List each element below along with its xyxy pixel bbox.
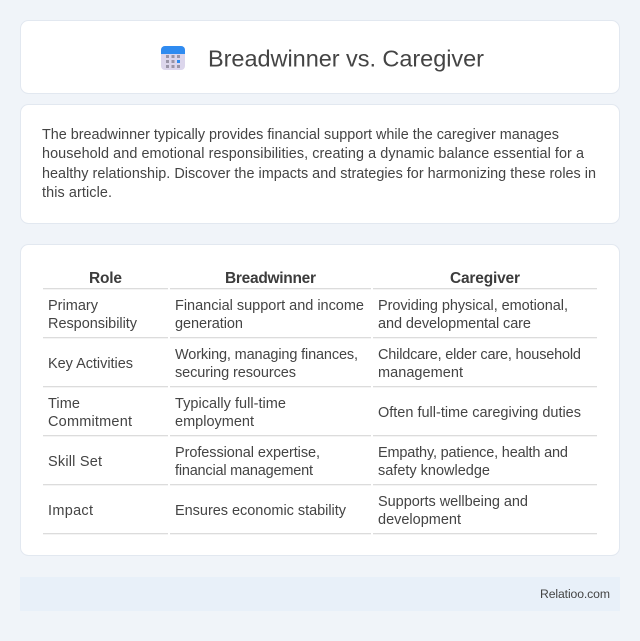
panel: comparison table [20,244,620,556]
row: key activities: Childcare, elder care, household [378,347,581,363]
intro text: healthy relationship. Discover the impacts and strategies for harmonizing these roles in [42,166,596,182]
intro text: The breadwinner typically provides financial support while the caregiver manages [42,127,559,143]
row: time commitment: Often full-time caregiving duties [378,405,581,421]
row: impact: Ensures economic stability [175,503,347,519]
row: time commitment: Time [48,396,80,412]
row: skill set [48,445,568,479]
footer credit: Relatioo.com [540,587,610,601]
intro text [42,127,596,201]
row: primary responsibility: Responsibility [48,316,138,332]
row: key activities: Key Activities [48,356,133,372]
panel: title header [20,20,620,94]
row: primary responsibility: Primary [48,298,99,314]
row: skill set: Empathy, patience, health and [378,445,568,461]
row: skill set: Skill Set [48,454,102,470]
row: time commitment: Typically full-time [175,396,286,412]
row: impact: Supports wellbeing and [378,494,528,510]
intro text: this article. [42,185,112,201]
icon: calendar [161,46,185,70]
row: time commitment: employment [175,414,254,430]
row: key activities [48,347,581,381]
panel: introduction [20,104,620,224]
footer bar [20,577,620,611]
row: primary responsibility: Financial support and income [175,298,364,314]
row: key activities: management [378,365,463,381]
row: impact [48,494,528,528]
row: primary responsibility: generation [175,316,243,332]
table header: Role [89,270,122,287]
row: time commitment [48,396,581,430]
row: impact: development [378,512,461,528]
row: skill set: financial management [175,463,313,479]
row: skill set: safety knowledge [378,463,490,479]
row: primary responsibility: Providing physical, emotional, [378,298,568,314]
row: impact: Impact [48,503,93,519]
row: primary responsibility: and developmental care [378,316,531,332]
intro text: household and emotional responsibilities, creating a dynamic balance essential for a [42,146,584,162]
table header [89,270,520,287]
title: Breadwinner vs. Caregiver [208,46,484,72]
row: primary responsibility [48,298,568,332]
row: time commitment: Commitment [48,414,132,430]
row: key activities: securing resources [175,365,296,381]
table header: Caregiver [450,270,520,287]
row: key activities: Working, managing finances, [175,347,358,363]
table header: Breadwinner [225,270,316,287]
row: skill set: Professional expertise, [175,445,320,461]
